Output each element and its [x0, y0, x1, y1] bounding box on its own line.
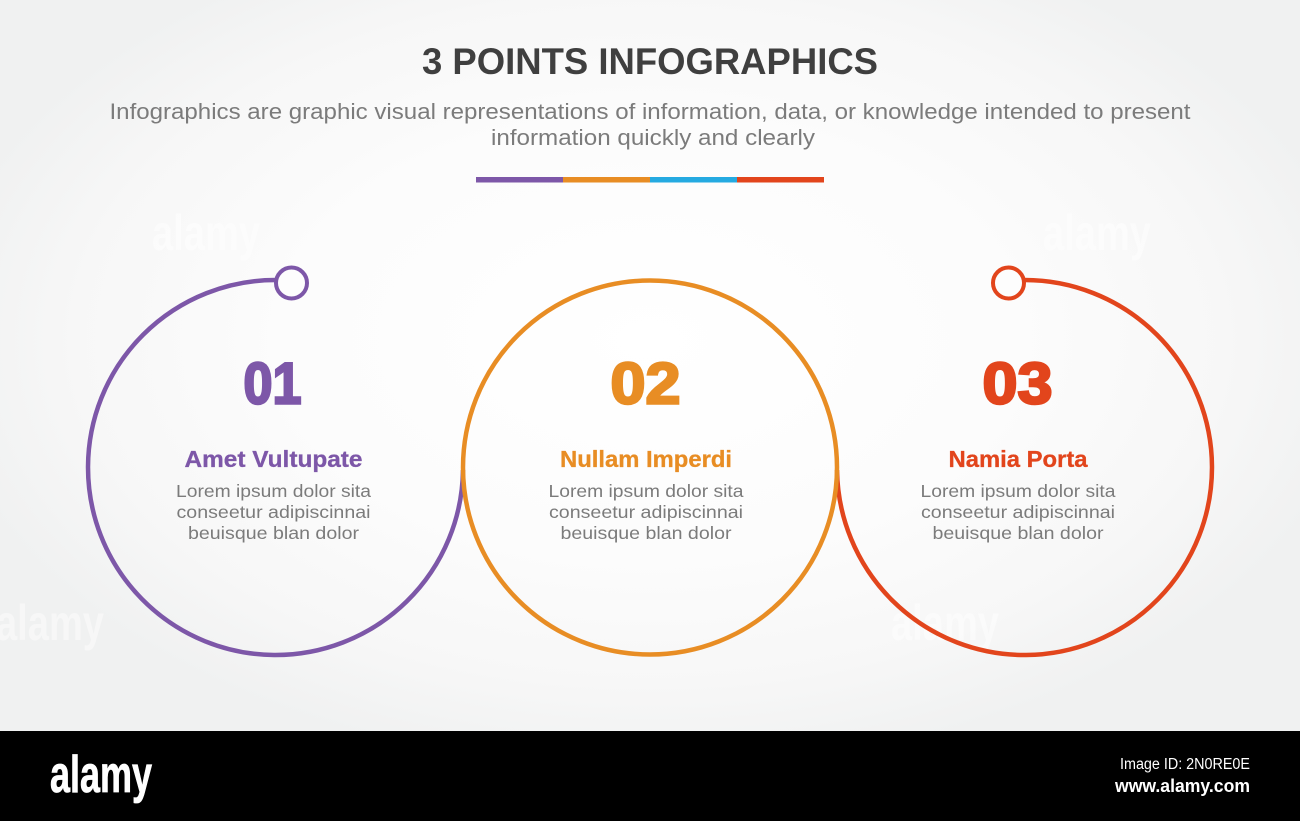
title divider: four colours	[476, 177, 824, 182]
number 02: 02	[610, 352, 680, 416]
watermarks: alamy	[1043, 205, 1151, 261]
subtitle: information quickly and clearly	[491, 125, 815, 150]
website: www.alamy.com	[1114, 776, 1250, 796]
body text: beuisque blan dolor	[932, 523, 1104, 543]
footer bar	[0, 731, 1300, 821]
body text: beuisque blan dolor	[560, 523, 732, 543]
image id: Image ID: 2N0RE0E	[1120, 756, 1250, 773]
subtitle	[110, 99, 1190, 150]
heading: Namia Porta	[948, 446, 1088, 472]
ring: red open circle	[837, 280, 1212, 655]
title: 3 POINTS INFOGRAPHICS	[422, 41, 878, 82]
body text	[920, 481, 1116, 543]
icon: purple node	[276, 268, 307, 298]
number 03: 03	[982, 352, 1052, 416]
body text: conseetur adipiscinnai	[549, 502, 743, 522]
icon: red node	[993, 268, 1024, 298]
body text: Lorem ipsum dolor sita	[176, 481, 371, 501]
number 01: 01	[244, 352, 302, 416]
heading: Nullam Imperdi	[560, 446, 732, 472]
body text: beuisque blan dolor	[188, 523, 359, 543]
ring: orange circle	[463, 280, 837, 654]
ring: purple open circle	[88, 280, 463, 655]
subtitle: Infographics are graphic visual representations of information, data, or knowledge intended to present	[110, 99, 1190, 124]
panel: point 1	[88, 268, 463, 655]
body text	[176, 481, 371, 543]
watermarks: alamy	[891, 595, 999, 651]
heading: Amet Vultupate	[184, 446, 362, 472]
body text: Lorem ipsum dolor sita	[548, 481, 744, 501]
body text: Lorem ipsum dolor sita	[920, 481, 1116, 501]
body text	[548, 481, 744, 543]
panel: point 2	[463, 280, 837, 654]
panel: point 3	[837, 268, 1212, 655]
watermarks: alamy	[152, 205, 260, 261]
body text: conseetur adipiscinnai	[921, 502, 1115, 522]
footer logo: alamy	[50, 746, 152, 804]
watermarks	[0, 205, 1151, 651]
watermarks: alamy	[0, 595, 104, 651]
body text: conseetur adipiscinnai	[176, 502, 370, 522]
